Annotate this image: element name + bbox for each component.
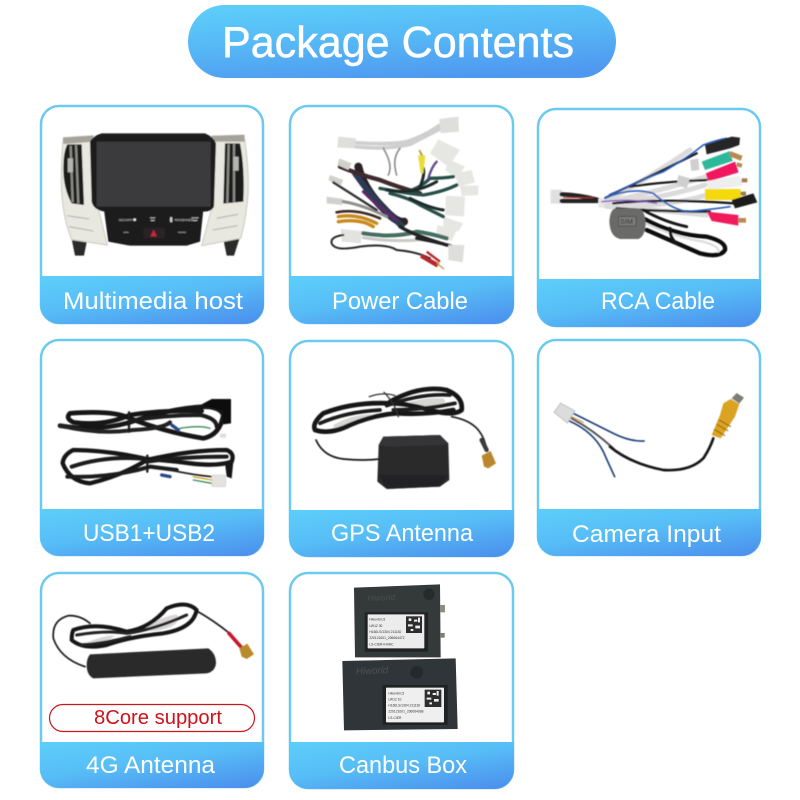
panel: 4g antenna (40, 573, 264, 788)
icon: canbus modules: H160LS/1304 211130 (388, 703, 420, 707)
panel: canbus box (289, 573, 514, 789)
icon: canbus modules: LS-CIER+HVAC (369, 643, 394, 647)
title banner (188, 5, 616, 78)
icon: canbus modules: 220121001_206064472 (369, 636, 405, 640)
label: rca cable: RCA Cable (601, 288, 715, 315)
icon: 4g antenna (53, 605, 254, 678)
icon: canbus modules (342, 584, 458, 730)
icon: head unit (61, 133, 248, 256)
label: power cable: Power Cable (332, 288, 468, 315)
panel: usb cables (40, 340, 264, 556)
callout: 8core support (50, 704, 254, 732)
icon: wiring harness (327, 117, 478, 269)
title banner: Package Contents (222, 18, 574, 67)
panel: rca cable (537, 109, 761, 327)
icon: canbus modules: Hiworld (367, 592, 396, 603)
label: gps antenna: GPS Antenna (331, 520, 474, 547)
label: canbus box: Canbus Box (339, 752, 467, 779)
callout: 8core support: 8Core support (94, 707, 222, 729)
icon: head unit: PASSENGER (175, 218, 194, 222)
panel: power cable (289, 106, 514, 324)
icon: canbus modules: LS-CIER (388, 716, 402, 720)
icon: canbus modules: Hiworld-L5 (388, 691, 404, 695)
icon: gps antenna (314, 389, 496, 489)
label: usb cables: USB1+USB2 (83, 520, 215, 547)
label: camera input: Camera Input (572, 521, 721, 548)
icon: head unit: SECURITY (119, 218, 134, 222)
label: 4g antenna: 4G Antenna (86, 752, 216, 779)
icon: canbus modules: LW12 30 (369, 624, 383, 628)
icon: usb cable coils (60, 399, 233, 487)
icon: rca harness: SIM (620, 217, 633, 226)
panel: camera input (537, 340, 761, 556)
icon: camera cable (554, 393, 744, 477)
panel: multimedia host (40, 106, 264, 324)
panel: gps antenna (289, 341, 514, 557)
label: multimedia host: Multimedia host (63, 288, 243, 315)
icon: canbus modules: H160LS/1304 211130 (369, 630, 401, 634)
icon: canbus modules: LW12 10 (388, 697, 402, 701)
icon: canbus modules: Hiworld (356, 665, 389, 677)
icon: canbus modules: Hiworld-L5 (369, 617, 385, 621)
icon: canbus modules: 220121001_206064088 (388, 709, 424, 713)
icon: rca harness (551, 137, 757, 255)
